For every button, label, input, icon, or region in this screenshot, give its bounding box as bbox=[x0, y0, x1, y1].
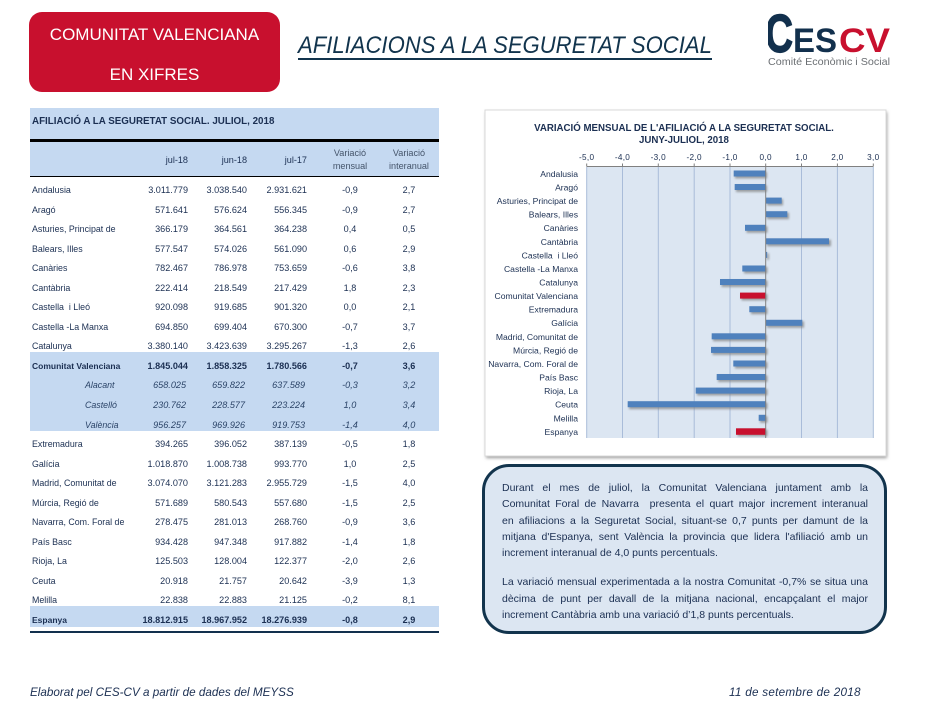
row: Cantàbria: 217.429 bbox=[274, 283, 307, 293]
category labels: Espanya bbox=[545, 427, 578, 437]
category labels: Extremadura bbox=[529, 305, 578, 315]
row: Múrcia: -1,5 bbox=[342, 498, 358, 508]
row: Espanya bbox=[32, 615, 415, 625]
row: País Basc: -1,4 bbox=[342, 537, 358, 547]
row: Rioja: -2,0 bbox=[342, 556, 358, 566]
row: Castelló: 230.762 bbox=[153, 400, 186, 410]
category labels: Castella i Lleó bbox=[522, 250, 578, 260]
row: Múrcia: 580.543 bbox=[214, 498, 247, 508]
value axis: -3,0 bbox=[651, 153, 666, 162]
row: Ceuta: 1,3 bbox=[403, 576, 415, 586]
footer: date: 11 de setembre de 2018 bbox=[729, 686, 861, 699]
highlight band: Espanya bbox=[30, 606, 439, 627]
row: Asturies: 364.561 bbox=[214, 224, 247, 234]
value axis: -4,0 bbox=[615, 153, 630, 162]
chart frame bbox=[485, 110, 887, 458]
row: València: 956.257 bbox=[153, 420, 186, 430]
value axis: -2,0 bbox=[687, 153, 702, 162]
chart title bbox=[534, 122, 834, 146]
highlight band: Comunitat Valenciana bbox=[30, 352, 439, 431]
row: Aragó: 556.345 bbox=[274, 205, 307, 215]
callout: commentary: increment interanual de 4,0 punts percentuals. bbox=[502, 547, 718, 559]
row: Ceuta: -3,9 bbox=[342, 576, 358, 586]
row: Múrcia: 557.680 bbox=[274, 498, 307, 508]
category labels: Melilla bbox=[554, 413, 578, 423]
row: Castella i Lleó bbox=[32, 302, 415, 312]
row: Extremadura: -0,5 bbox=[342, 439, 358, 449]
bar: Comunitat Valenciana bbox=[740, 293, 766, 299]
table header: Variació bbox=[334, 148, 366, 158]
callout: commentary: Durant el mes de juliol, la Comunitat Valenciana juntament amb la bbox=[502, 482, 868, 494]
row: Aragó: -0,9 bbox=[342, 205, 358, 215]
row: Castelló: 1,0 bbox=[344, 400, 356, 410]
row: Alacant: 3,2 bbox=[403, 380, 415, 390]
row: Galícia: 1.018.870 bbox=[148, 459, 188, 469]
row: Rioja: 2,6 bbox=[403, 556, 415, 566]
row: Canàries: 753.659 bbox=[274, 263, 307, 273]
category labels: Rioja, La bbox=[544, 386, 578, 396]
row: Extremadura bbox=[32, 439, 415, 449]
footer: source: Elaborat pel CES-CV a partir de dades del MEYSS bbox=[30, 686, 294, 699]
table header: jun-18 bbox=[222, 155, 247, 165]
row: Castella-La Manxa: 694.850 bbox=[155, 322, 188, 332]
row: Andalusia: 3.038.540 bbox=[207, 185, 247, 195]
row: Galícia: Galícia bbox=[32, 459, 60, 469]
row: Rioja: 128.004 bbox=[214, 556, 247, 566]
row: Ceuta: Ceuta bbox=[32, 576, 56, 586]
row: Extremadura: 396.052 bbox=[214, 439, 247, 449]
row: Catalunya bbox=[32, 341, 415, 351]
row: Castella i Lleó: 0,0 bbox=[344, 302, 356, 312]
category labels: Comunitat Valenciana bbox=[495, 291, 578, 301]
row: Rioja bbox=[32, 556, 415, 566]
row: Andalusia: Andalusia bbox=[32, 185, 71, 195]
row: Castelló bbox=[85, 400, 415, 410]
row: València: 4,0 bbox=[403, 420, 415, 430]
row: Castella i Lleó: 920.098 bbox=[155, 302, 188, 312]
row: Múrcia: 2,5 bbox=[403, 498, 415, 508]
callout: commentary: mitjana d'Espanya, sent València la provincia que lidera l'afiliació amb un bbox=[502, 531, 868, 543]
row: País Basc bbox=[32, 537, 415, 547]
row: Espanya: 18.967.952 bbox=[201, 615, 247, 625]
row: Espanya: -0,8 bbox=[342, 615, 358, 625]
category labels: Asturies, Principat de bbox=[497, 196, 578, 206]
row: Múrcia bbox=[32, 498, 415, 508]
value axis: -5,0 bbox=[579, 153, 594, 162]
row: Canàries: Canàries bbox=[32, 263, 67, 273]
row: Espanya: 2,9 bbox=[403, 615, 415, 625]
row: Múrcia: 571.689 bbox=[155, 498, 188, 508]
row: Rioja: 122.377 bbox=[274, 556, 307, 566]
callout: commentary: dècima de punt per davall de la mitjana nacional, encapçalant el major bbox=[502, 593, 868, 605]
row: Castella i Lleó: 919.685 bbox=[214, 302, 247, 312]
title badge: EN XIFRES bbox=[110, 65, 199, 84]
row: Castella i Lleó: 901.320 bbox=[274, 302, 307, 312]
row: Andalusia: 3.011.779 bbox=[148, 185, 188, 195]
category labels bbox=[488, 169, 579, 437]
value axis: 3,0 bbox=[867, 153, 880, 162]
category labels: Castella -La Manxa bbox=[504, 264, 578, 274]
row: Navarra: 268.760 bbox=[274, 517, 307, 527]
table header: jul-17 bbox=[285, 155, 307, 165]
row: Comunitat Valenciana: 1.858.325 bbox=[207, 361, 247, 371]
row: Espanya: Espanya bbox=[32, 615, 67, 625]
bars bbox=[628, 170, 829, 435]
category labels: País Basc bbox=[539, 372, 579, 382]
row: Castelló: 228.577 bbox=[212, 400, 245, 410]
title badge bbox=[29, 12, 280, 92]
row: Ceuta: 21.757 bbox=[219, 576, 247, 586]
row: Ceuta bbox=[32, 576, 415, 586]
row: Ceuta: 20.918 bbox=[160, 576, 188, 586]
row: Comunitat Valenciana: 3,6 bbox=[403, 361, 415, 371]
bar shadows bbox=[629, 172, 831, 436]
category labels: Navarra, Com. Foral de bbox=[488, 359, 578, 369]
title badge: COMUNITAT VALENCIANA bbox=[50, 25, 259, 44]
row: Canàries bbox=[32, 263, 415, 273]
category labels: Múrcia, Regió de bbox=[513, 345, 578, 355]
row: Melilla bbox=[32, 595, 415, 605]
row: València: 969.926 bbox=[212, 420, 245, 430]
row: Melilla: Melilla bbox=[32, 595, 57, 605]
row: Melilla: 8,1 bbox=[403, 595, 415, 605]
row: Asturies: 0,4 bbox=[344, 224, 356, 234]
row: Múrcia: Múrcia, Regió de bbox=[32, 498, 99, 508]
category labels: Canàries bbox=[544, 223, 578, 233]
row: Comunitat Valenciana: Comunitat Valenciana bbox=[32, 361, 120, 371]
row: Castella-La Manxa bbox=[32, 322, 415, 332]
row: Alacant: Alacant bbox=[85, 380, 114, 390]
row: Melilla: 22.838 bbox=[160, 595, 188, 605]
row: Castella i Lleó: Castella i Lleó bbox=[32, 302, 90, 312]
row: Aragó: 2,7 bbox=[403, 205, 415, 215]
value axis: 1,0 bbox=[795, 153, 808, 162]
row: Canàries: 782.467 bbox=[155, 263, 188, 273]
row: Canàries: 3,8 bbox=[403, 263, 415, 273]
row: Comunitat Valenciana: 1.780.566 bbox=[267, 361, 307, 371]
logo: CES-CV: Comité Econòmic i Social bbox=[768, 56, 890, 68]
row: Cantàbria: 218.549 bbox=[214, 283, 247, 293]
row: Asturies bbox=[32, 224, 415, 234]
row: País Basc: 934.428 bbox=[155, 537, 188, 547]
row: Cantàbria: 2,3 bbox=[403, 283, 415, 293]
row: Alacant: 637.589 bbox=[272, 380, 305, 390]
row: País Basc: País Basc bbox=[32, 537, 72, 547]
value axis bbox=[579, 153, 880, 166]
row: Andalusia: 2.931.621 bbox=[267, 185, 307, 195]
row: Galícia bbox=[32, 459, 415, 469]
category labels: Balears, Illes bbox=[529, 210, 578, 220]
row: Ceuta: 20.642 bbox=[279, 576, 307, 586]
category labels: Galícia bbox=[551, 318, 578, 328]
row: Navarra bbox=[32, 517, 415, 527]
row: Madrid: 2.955.729 bbox=[267, 478, 307, 488]
value axis: -1,0 bbox=[722, 153, 738, 162]
row: Castelló: 3,4 bbox=[403, 400, 415, 410]
category labels: Aragó bbox=[555, 182, 578, 192]
row: Cantàbria: 1,8 bbox=[344, 283, 356, 293]
main title: AFILIACIONS A LA SEGURETAT SOCIAL bbox=[298, 32, 712, 59]
row: Espanya: 18.812.915 bbox=[142, 615, 188, 625]
value axis: 0,0 bbox=[760, 153, 772, 162]
row: Aragó bbox=[32, 205, 415, 215]
row: Castelló: Castelló bbox=[85, 400, 117, 410]
row: Asturies: 0,5 bbox=[403, 224, 415, 234]
row: Catalunya: 3.423.639 bbox=[207, 341, 247, 351]
row: Andalusia bbox=[32, 185, 415, 195]
row: Comunitat Valenciana: -0,7 bbox=[342, 361, 358, 371]
row: Melilla: 21.125 bbox=[279, 595, 307, 605]
bar: Espanya bbox=[736, 428, 766, 435]
row: Balears: 0,6 bbox=[344, 244, 356, 254]
chart title: VARIACIÓ MENSUAL DE L'AFILIACIÓ A LA SEGURETAT SOCIAL. bbox=[534, 122, 834, 134]
category labels: Cantàbria bbox=[541, 237, 578, 247]
row: Extremadura: 1,8 bbox=[403, 439, 415, 449]
row: Balears: 2,9 bbox=[403, 244, 415, 254]
table header: mensual bbox=[333, 161, 367, 171]
table header bbox=[30, 139, 439, 177]
panel: data table bbox=[30, 108, 439, 633]
row: Catalunya: 3.380.140 bbox=[148, 341, 188, 351]
row: País Basc: 917.882 bbox=[274, 537, 307, 547]
row: Andalusia: 2,7 bbox=[403, 185, 415, 195]
table bottom rule bbox=[30, 631, 439, 633]
row: Catalunya: Catalunya bbox=[32, 341, 72, 351]
row: Alacant: -0,3 bbox=[342, 380, 358, 390]
row: Castella-La Manxa: Castella -La Manxa bbox=[32, 322, 108, 332]
panel: bar chart bbox=[484, 110, 889, 460]
row: Cantàbria: Cantàbria bbox=[32, 283, 70, 293]
table header: interanual bbox=[389, 161, 429, 171]
row: Alacant: 659.822 bbox=[212, 380, 245, 390]
row: País Basc: 947.348 bbox=[214, 537, 247, 547]
row: Balears: Balears, Illes bbox=[32, 244, 83, 254]
row: Navarra: Navarra, Com. Foral de bbox=[32, 517, 124, 527]
table title band bbox=[30, 108, 439, 139]
row: Espanya: 18.276.939 bbox=[261, 615, 307, 625]
row: Galícia: 1.008.738 bbox=[207, 459, 247, 469]
logo: CES-CV bbox=[768, 14, 890, 68]
category axis bbox=[765, 167, 767, 438]
value axis: 2,0 bbox=[831, 153, 844, 162]
row: Madrid: 3.121.283 bbox=[207, 478, 247, 488]
row: Galícia: 1,0 bbox=[344, 459, 356, 469]
row: Navarra: 3,6 bbox=[403, 517, 415, 527]
row: Asturies: Asturies, Principat de bbox=[32, 224, 116, 234]
row: Navarra: 281.013 bbox=[214, 517, 247, 527]
row: Rioja: Rioja, La bbox=[32, 556, 67, 566]
row: València: -1,4 bbox=[342, 420, 358, 430]
category labels: Andalusia bbox=[540, 169, 578, 179]
row: Navarra: -0,9 bbox=[342, 517, 358, 527]
row: Galícia: 993.770 bbox=[274, 459, 307, 469]
row: Aragó: 571.641 bbox=[155, 205, 188, 215]
row: València: València bbox=[85, 420, 119, 430]
row: Cantàbria: 222.414 bbox=[155, 283, 188, 293]
row: Aragó: Aragó bbox=[32, 205, 56, 215]
row: Rioja: 125.503 bbox=[155, 556, 188, 566]
row: Castella-La Manxa: 699.404 bbox=[214, 322, 247, 332]
row: Asturies: 364.238 bbox=[274, 224, 307, 234]
row: Comunitat Valenciana: 1.845.044 bbox=[148, 361, 188, 371]
callout: commentary: La variació mensual experimentada a la nostra Comunitat -0,7% se situa una bbox=[502, 576, 868, 588]
category labels: Catalunya bbox=[539, 278, 578, 288]
row: Castella-La Manxa: -0,7 bbox=[342, 322, 358, 332]
row: Galícia: 2,5 bbox=[403, 459, 415, 469]
row: Andalusia: -0,9 bbox=[342, 185, 358, 195]
chart title: JUNY-JULIOL, 2018 bbox=[639, 135, 730, 146]
row: Castella i Lleó: 2,1 bbox=[403, 302, 415, 312]
row: Castella-La Manxa: 3,7 bbox=[403, 322, 415, 332]
row: Castelló: 223.224 bbox=[272, 400, 305, 410]
row: Madrid: 4,0 bbox=[403, 478, 415, 488]
row: Alacant: 658.025 bbox=[153, 380, 186, 390]
row: Balears: 577.547 bbox=[155, 244, 188, 254]
row: Castella-La Manxa: 670.300 bbox=[274, 322, 307, 332]
row: Balears bbox=[32, 244, 415, 254]
table header: Variació bbox=[393, 148, 425, 158]
row: País Basc: 1,8 bbox=[403, 537, 415, 547]
logo: CES-CV: ES bbox=[793, 22, 837, 60]
row: Canàries: -0,6 bbox=[342, 263, 358, 273]
table title band: AFILIACIÓ A LA SEGURETAT SOCIAL. JULIOL, 2018 bbox=[32, 116, 274, 127]
row: Asturies: 366.179 bbox=[155, 224, 188, 234]
row: Cantàbria bbox=[32, 283, 415, 293]
row: València bbox=[85, 420, 416, 430]
table header: jul-18 bbox=[166, 155, 188, 165]
row: València: 919.753 bbox=[272, 420, 305, 430]
callout: commentary: increment Cantàbria amb una variació d’1,8 punts percentuals. bbox=[502, 609, 794, 621]
row: Melilla: 22.883 bbox=[219, 595, 247, 605]
row: Madrid bbox=[32, 478, 415, 488]
callout: commentary: Comunitat Foral de Navarra presenta el quart major increment interanual bbox=[502, 498, 868, 510]
callout: commentary bbox=[482, 464, 887, 634]
row: Catalunya: 3.295.267 bbox=[267, 341, 307, 351]
row: Navarra: 278.475 bbox=[155, 517, 188, 527]
row: Aragó: 576.624 bbox=[214, 205, 247, 215]
row: Balears: 574.026 bbox=[214, 244, 247, 254]
row: Catalunya: 2,6 bbox=[403, 341, 415, 351]
row: Catalunya: -1,3 bbox=[342, 341, 358, 351]
logo: CES-CV: CV bbox=[839, 22, 890, 60]
category labels: Madrid, Comunitat de bbox=[496, 332, 578, 342]
row: Melilla: -0,2 bbox=[342, 595, 358, 605]
row: Canàries: 786.978 bbox=[214, 263, 247, 273]
plot area and grid bbox=[587, 167, 873, 438]
row: Madrid: Madrid, Comunitat de bbox=[32, 478, 117, 488]
category labels: Ceuta bbox=[555, 400, 578, 410]
row: Madrid: -1,5 bbox=[342, 478, 358, 488]
callout: commentary: en afiliacions a la Seguretat Social, situant-se 0,7 punts per damunt de la bbox=[502, 514, 868, 526]
row: Comunitat Valenciana bbox=[32, 361, 415, 371]
row: Balears: 561.090 bbox=[274, 244, 307, 254]
row: Extremadura: 394.265 bbox=[155, 439, 188, 449]
row: Extremadura: Extremadura bbox=[32, 439, 83, 449]
row: Alacant bbox=[84, 380, 416, 390]
row: Extremadura: 387.139 bbox=[274, 439, 307, 449]
row: Madrid: 3.074.070 bbox=[148, 478, 188, 488]
